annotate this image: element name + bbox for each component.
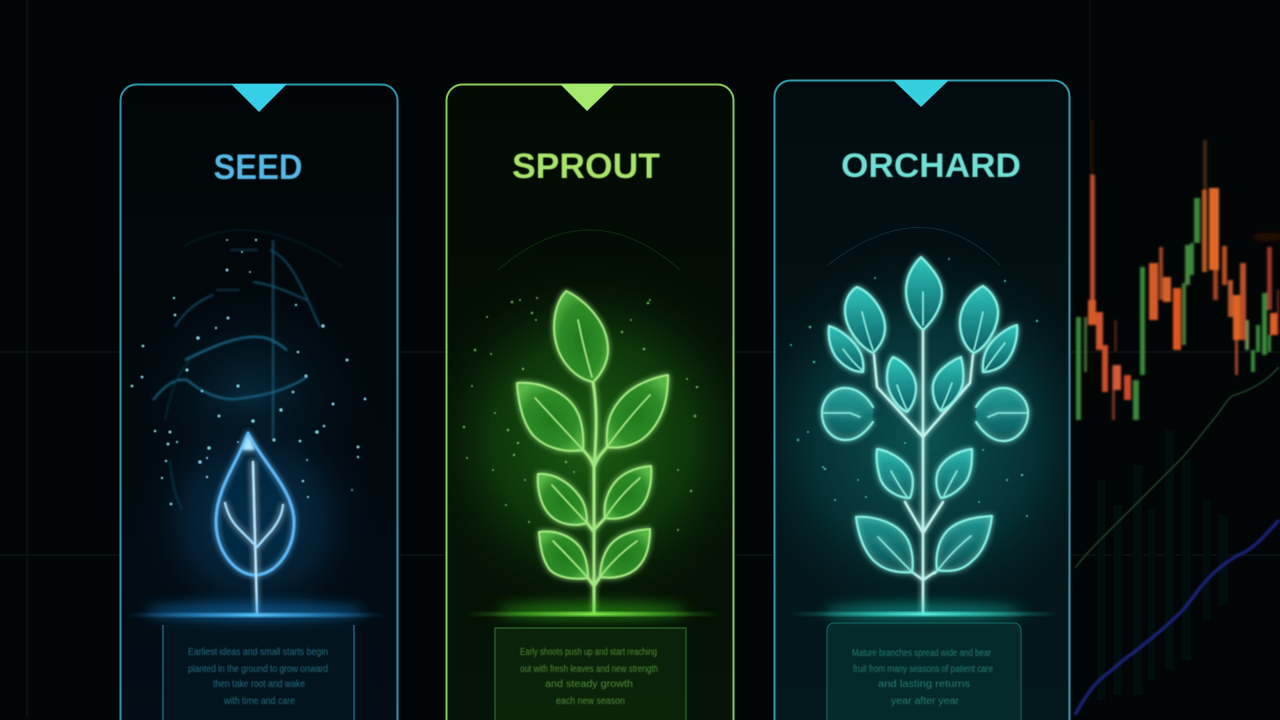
- leaf glow: [122, 395, 395, 645]
- description text: [520, 647, 658, 707]
- description text: fruit from many seasons of patient care: [853, 664, 993, 675]
- marker triangle: [893, 80, 949, 107]
- heading: SPROUT: [512, 147, 660, 186]
- card outline: [120, 84, 398, 720]
- description text: Mature branches spread wide and bear: [852, 648, 992, 659]
- panel: seed: [120, 84, 398, 720]
- description box: [163, 625, 354, 720]
- leaf veins: [823, 292, 1027, 574]
- particle dots: [463, 297, 698, 531]
- ground glow: [465, 603, 720, 619]
- ground glow: [790, 604, 1060, 620]
- description text: Earliest ideas and small starts begin: [188, 647, 328, 658]
- background glow: [776, 225, 1068, 720]
- icon: seed leaf: [216, 433, 294, 613]
- card outline: [446, 84, 734, 720]
- market chart backdrop: [1075, 120, 1280, 715]
- description text: out with fresh leaves and new strength: [520, 664, 658, 675]
- leaf veins: [535, 320, 650, 578]
- branches: [874, 330, 973, 612]
- leaves: [822, 257, 1028, 572]
- trend line: green: [1075, 367, 1279, 568]
- star dots: [131, 239, 366, 505]
- description box: [495, 628, 686, 720]
- dome arc: [498, 230, 680, 270]
- description text: and lasting returns: [878, 679, 970, 690]
- description text: each new season: [556, 696, 625, 707]
- dome arc: [828, 228, 1000, 265]
- heading: ORCHARD: [841, 147, 1021, 185]
- leaves: [517, 291, 668, 579]
- description text: [852, 648, 993, 707]
- description box: [827, 623, 1021, 720]
- card outline: [774, 80, 1070, 720]
- constellation arcs: [153, 230, 343, 510]
- particle dots: [790, 258, 1038, 517]
- background glow: [122, 275, 395, 720]
- description text: then take root and wake: [213, 679, 305, 690]
- panel: sprout: [446, 84, 734, 720]
- marker triangle: [231, 84, 287, 112]
- description text: [188, 647, 328, 707]
- background glow: [448, 225, 732, 720]
- description text: and steady growth: [545, 679, 633, 690]
- icon: orchard tree: [822, 257, 1028, 612]
- trend line: blue: [1075, 520, 1279, 715]
- candlesticks: [1076, 120, 1280, 420]
- description text: planted in the ground to grow onward: [188, 664, 328, 675]
- description text: Early shoots push up and start reaching: [520, 647, 657, 658]
- stem: [583, 382, 607, 612]
- icon: sprout plant: [517, 291, 668, 612]
- heading: SEED: [214, 148, 302, 187]
- volume bars: [1097, 430, 1228, 700]
- ground glow: [125, 603, 387, 621]
- panel: orchard: [774, 80, 1070, 720]
- description text: year after year: [891, 696, 960, 707]
- marker triangle: [560, 84, 615, 111]
- description text: with time and care: [223, 696, 295, 707]
